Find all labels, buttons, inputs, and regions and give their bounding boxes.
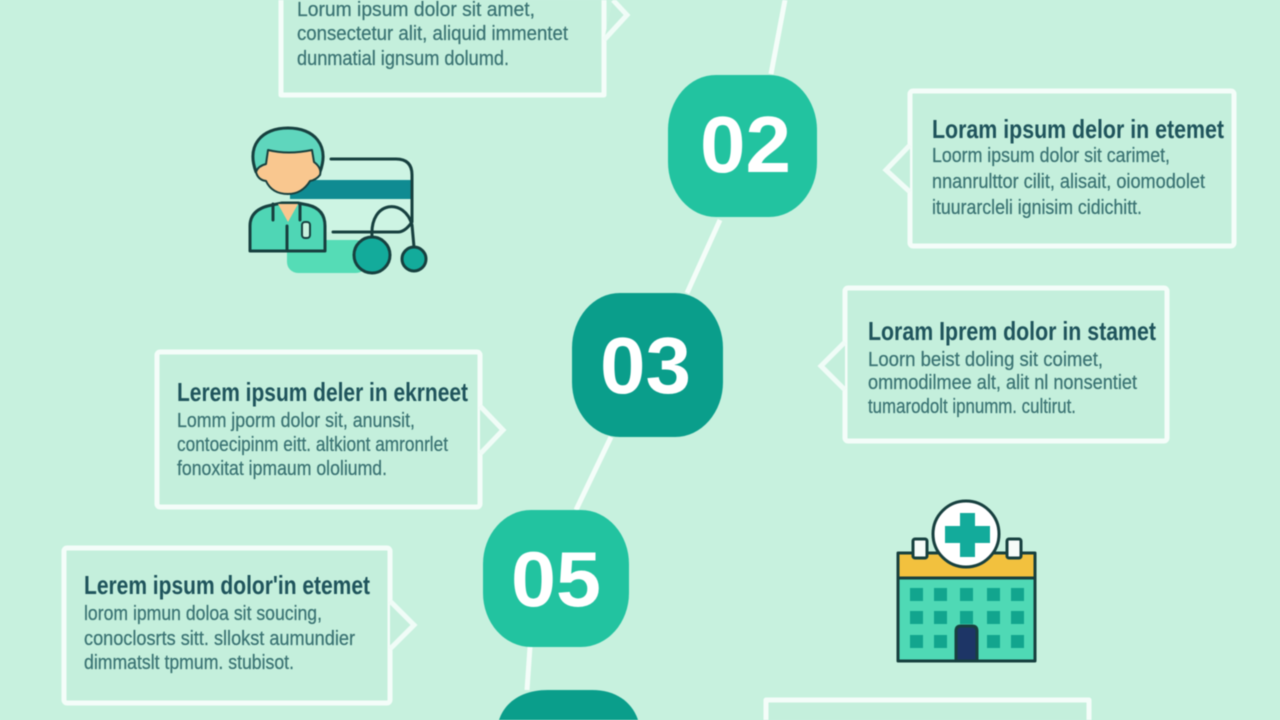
body text: top left box xyxy=(297,0,568,70)
icon part: windows xyxy=(910,588,1024,648)
heading: step 03: Loram Iprem dolor in stamet xyxy=(868,316,1156,346)
panel: top left text box xyxy=(281,0,627,95)
step badge 03 xyxy=(572,293,723,437)
body text: step 05: lorom ipmun doloa sit soucing, xyxy=(84,603,322,625)
body text: step 03 xyxy=(868,349,1137,418)
panel: step 03 text box xyxy=(821,288,1167,441)
icon: hospital building xyxy=(898,501,1035,661)
body text: left box: fonoxitat ipmaum ololiumd. xyxy=(177,458,387,480)
heading: step 05: Lerem ipsum dolor'in etemet xyxy=(84,570,370,600)
timeline connector line xyxy=(527,0,785,690)
panel: step 02 text box xyxy=(886,91,1234,246)
body text: top left box: consectetur alit, aliquid immentet xyxy=(297,23,568,45)
icon part: green backing shape xyxy=(287,240,367,273)
body text: left box: contoecipinm eitt. altkiont amronrlet xyxy=(177,434,448,456)
body text: step 05: dimmatslt tpmum. stubisot. xyxy=(84,652,294,674)
body text: step 05: conoclosrts sitt. sllokst aumundier xyxy=(84,628,355,650)
icon part: roof sign posts xyxy=(913,539,1021,558)
icon part: teal card band xyxy=(290,180,412,199)
body text: step 02: Loorm ipsum dolor sit carimet, xyxy=(932,145,1170,167)
body text: step 02: ituurarcleli ignisim cidichitt. xyxy=(932,197,1142,219)
icon part: doctor body xyxy=(250,203,325,251)
body text: left box: Lomm jporm dolor sit, anunsit, xyxy=(177,410,415,432)
body text: step 02: nnanrulttor cilit, alisait, oiomodolet xyxy=(932,171,1205,193)
step badge, cropped at bottom edge xyxy=(499,690,638,720)
step badge 05 xyxy=(483,510,629,647)
icon part: pale card fill xyxy=(300,160,412,232)
step badge 02 xyxy=(668,75,817,217)
step badge 02: 02 xyxy=(700,100,791,189)
icon part: yellow roof xyxy=(898,553,1035,578)
body text: left box xyxy=(177,410,448,480)
icon part: door xyxy=(956,626,977,661)
icon part: card outline xyxy=(331,159,412,232)
body text: step 05 xyxy=(84,603,355,674)
icon part: medical cross sign xyxy=(933,501,999,567)
icon: doctor with stethoscope xyxy=(250,128,426,273)
body text: step 03: tumarodolt ipnumm. cultirut. xyxy=(868,396,1076,418)
panel: bottom text box, cropped at bottom edge xyxy=(766,700,1089,720)
body text: step 03: Loorn beist doling sit coimet, xyxy=(868,349,1103,371)
panel: left text box xyxy=(157,352,503,507)
icon part: stethoscope xyxy=(354,207,426,273)
heading: left box: Lerem ipsum deler in ekrneet xyxy=(177,377,468,407)
icon part: building facade xyxy=(898,578,1035,661)
body text: top left box: dunmatial ignsum dolumd. xyxy=(297,48,509,70)
step badge 05: 05 xyxy=(511,535,601,623)
panel: step 05 text box xyxy=(64,548,414,703)
body text: step 03: ommodilmee alt, alit nl nonsentiet xyxy=(868,372,1137,394)
step badge 03: 03 xyxy=(600,321,691,410)
heading: step 02: Loram ipsum delor in etemet xyxy=(932,114,1224,144)
body text: step 02 xyxy=(932,145,1205,219)
icon part: doctor head xyxy=(253,128,323,194)
